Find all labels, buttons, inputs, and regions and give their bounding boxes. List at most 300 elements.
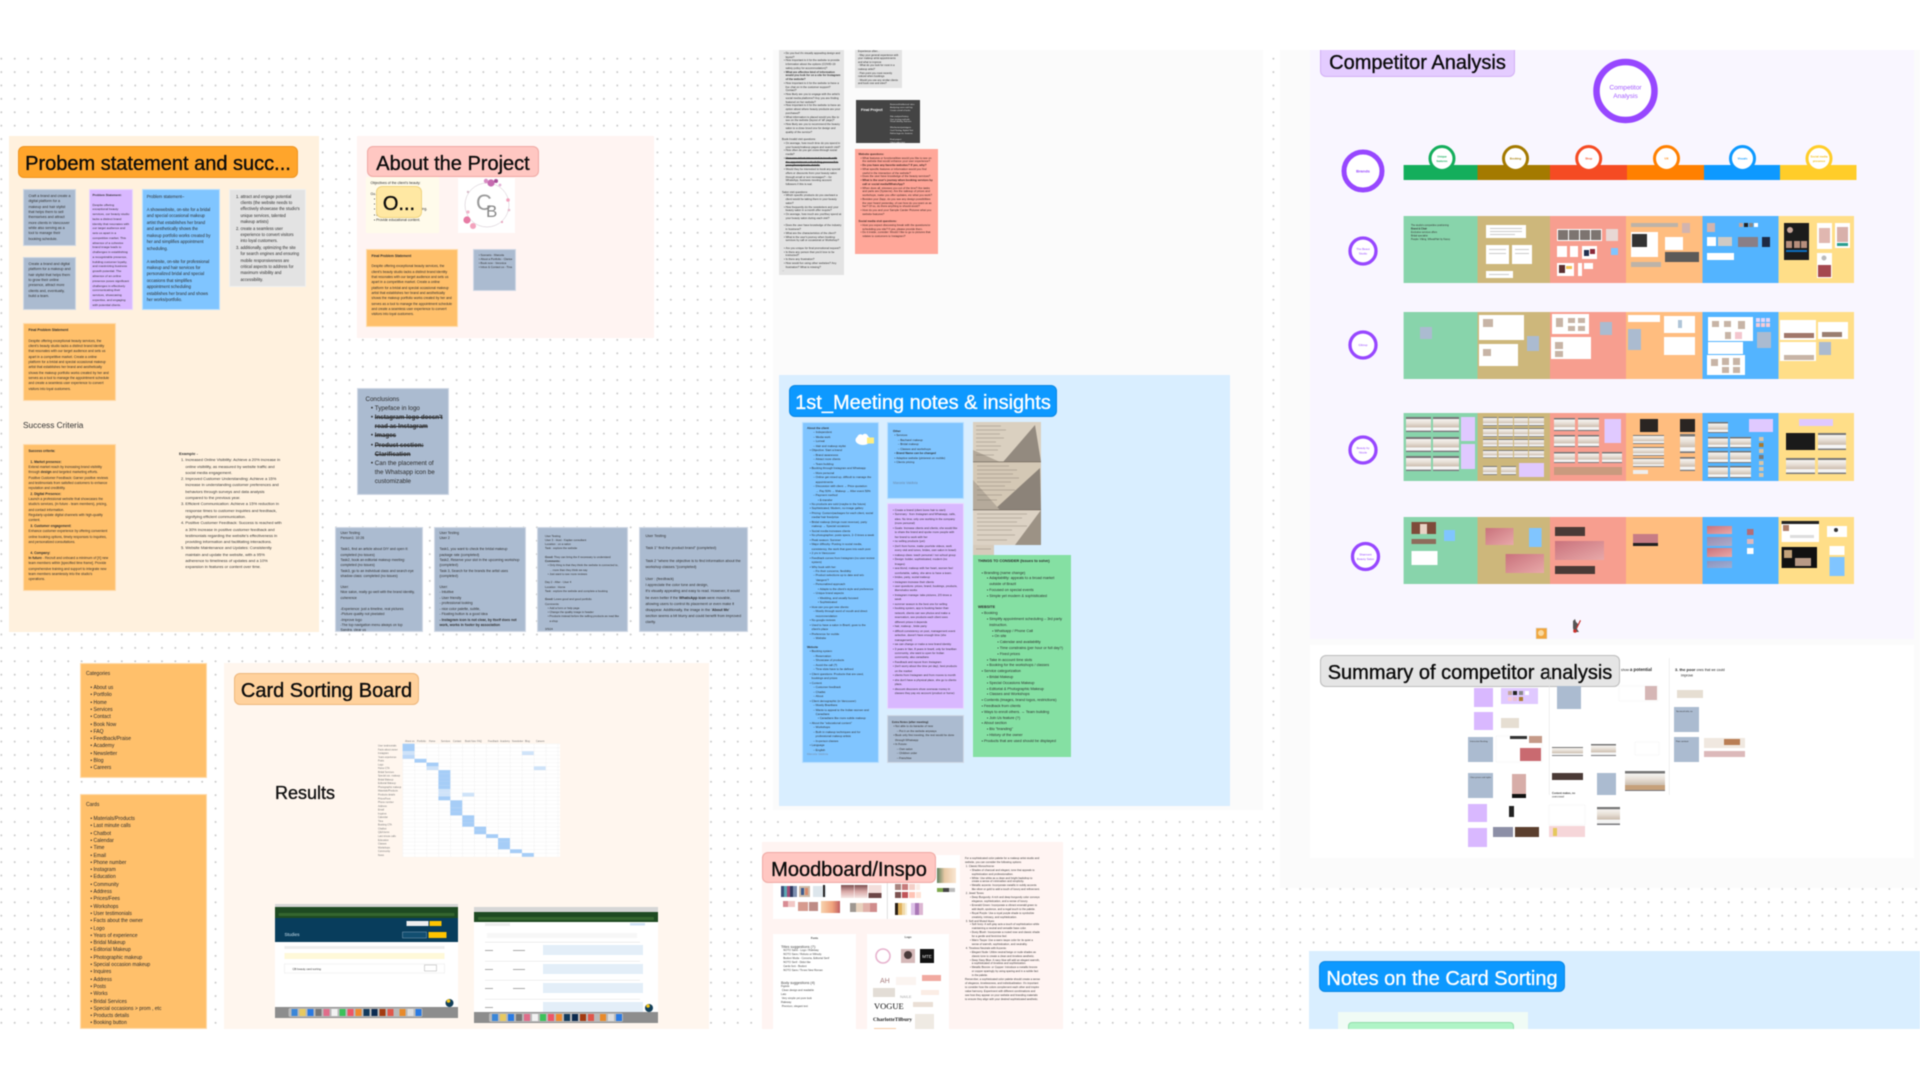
note: website questions: Website questions: bbox=[858, 152, 884, 156]
text block: success examples: Improved Customer Understanding: Achieve a 15% increase in understanding customer preferences and behaviors through surveys and data analysis compared to the previous year. bbox=[185, 476, 279, 500]
note: website questions: Do you have any favorite websites? If yes, why? bbox=[862, 163, 926, 167]
text: slide title: Final Project bbox=[861, 108, 883, 112]
chart: card sort results matrix bbox=[378, 740, 560, 858]
note: card sorting cards: Bridal Makeup bbox=[94, 940, 125, 946]
note: success criteria: 2. Digital Presence: bbox=[30, 492, 61, 496]
note: things to consider: Products that are used should be displayed bbox=[984, 739, 1056, 743]
node: ux: UX bbox=[1665, 156, 1669, 160]
note: things to consider: Time constrains (per hour or full day?) bbox=[1000, 646, 1063, 650]
note: things to consider: Ways to enroll others. → Team building bbox=[984, 710, 1049, 714]
heading: card sorting board bbox=[234, 673, 419, 705]
note: user testing person two: - Instagram icon is not clear, by itself does not work, works in footer by association bbox=[440, 618, 517, 627]
heading: moodboard: Moodboard/Inspo bbox=[771, 858, 927, 880]
image: card sorting results screenshot bbox=[473, 906, 659, 1024]
note: about the client: Website bbox=[807, 645, 818, 649]
panel: font suggestions: Titles suggestions (7): bbox=[781, 945, 816, 949]
note: about the client: No products are sold (maybe in the future) bbox=[812, 502, 866, 506]
note: extra notes after meeting: Children order bbox=[899, 751, 917, 755]
panel: competitor analysis bbox=[1310, 50, 1914, 639]
panel: font suggestions: Raleway bbox=[781, 1001, 791, 1004]
note: about the client: No google reviews bbox=[812, 618, 835, 622]
note: objectives: Simplify appointment scheduling. bbox=[376, 207, 427, 211]
note: about the client: English bbox=[816, 748, 825, 752]
note: card sorting categories: Newsletter bbox=[94, 751, 117, 757]
chart: card sort results matrix: Feedback bbox=[488, 740, 499, 743]
panel: font suggestions bbox=[773, 934, 856, 1029]
text block: colour palette advice: Remember, a sophisticated color palette should create a sense of elegance, timelessness, and individualization. It's important to consider how the colors complement each other and inspire value harmony. Experiment with different combinations and see how they appear on your website and branding materials to ensure they align with your desired sophisticated aesthetic. bbox=[965, 978, 1040, 1001]
column: strengths with notes bbox=[1468, 688, 1542, 847]
note: success criteria: Success criteria: bbox=[28, 449, 55, 453]
row: brand one comparison bbox=[1404, 216, 1854, 283]
card: green note header bbox=[1348, 1022, 1514, 1042]
note: website questions: Do it inside, consider: Would I like to go to pictures that relates to customers to Instagram? bbox=[862, 230, 930, 238]
text block: colour palette advice: White: Use white as a clean and bright backdrop to create a sense of minimalism and simplicity. bbox=[972, 877, 1032, 883]
note: about the client: Social media increases clients bbox=[812, 529, 850, 533]
note: card sorting cards: Time bbox=[94, 845, 104, 851]
note: about the client: Mostly Brazilians bbox=[816, 703, 837, 707]
note: user testing person three: Products instead before the selling products as read like a shop bbox=[549, 614, 619, 622]
note: other services: Adaptive website (pinterest on mobile) bbox=[896, 456, 945, 460]
note: about the client: Objective: Start a brand bbox=[812, 448, 842, 452]
text: show a potential heading: show a potential bbox=[1621, 667, 1652, 672]
panel: about the project bbox=[357, 136, 654, 338]
note: about the client: Hair and makeup stylist bbox=[816, 444, 846, 448]
note: about the client: Payment method bbox=[816, 493, 838, 497]
text block: colour palette advice: Shades of charcoal and elegant, tone that appeals to sophistication and professionalism. bbox=[972, 869, 1035, 876]
heading: card sorting board: Card Sorting Board bbox=[241, 680, 412, 702]
note: other services: Marcela Valdivia bbox=[893, 481, 918, 485]
heading: results: Results bbox=[275, 783, 335, 803]
note: user testing person two: User: bbox=[440, 585, 448, 589]
note: extra notes after meeting: Book only first meeting, the rest would be done through Whatsapp bbox=[895, 733, 954, 742]
note: objectives: Increase brand awareness. bbox=[376, 213, 418, 217]
column: poor examples: Poor contrast bbox=[1676, 740, 1689, 743]
row: brand one comparison: Exclusive services offers bbox=[1411, 231, 1438, 234]
panel: font suggestions: Clean design and readable bbox=[782, 989, 814, 992]
note: meeting insights: we can change or make a new brand identity bbox=[895, 642, 951, 646]
text: slide bullets: Card Testing, Hybrid Test bbox=[890, 130, 913, 132]
text: the poor ones heading bbox=[1675, 667, 1725, 678]
note: user testing person four: User : (feedback) bbox=[646, 577, 674, 581]
heading: competitor analysis: Competitor Analysis bbox=[1329, 52, 1506, 74]
note: interview questions column: What are effective kind of information would you look for on a site for Instagram of the website? bbox=[786, 70, 840, 81]
panel: problem statement and success criteria bbox=[9, 136, 319, 632]
note: things to consider: Calendar and availability bbox=[1000, 640, 1041, 644]
row: brand four comparison bbox=[1404, 517, 1854, 584]
note: user testing person two bbox=[434, 527, 526, 632]
text block: colour palette advice: Timeless Neutrals with Accents: bbox=[969, 947, 1007, 950]
note: interview questions column: Which specific products do you use/want a client would be taking them in your beauty salon? bbox=[786, 194, 838, 205]
note: card sorting categories: Portfolio bbox=[94, 692, 112, 698]
node: competitor analysis root circle: Competitor bbox=[1609, 84, 1642, 92]
node: brand two circle: Glitzup bbox=[1358, 343, 1368, 347]
note: about the client: Media work bbox=[816, 435, 830, 439]
note: card sorting cards: Photographic makeup bbox=[94, 955, 142, 961]
chart: card sort results matrix: Products details bbox=[378, 794, 396, 796]
note: card sorting cards: User testimonials bbox=[94, 911, 132, 917]
panel: font suggestions: Very simple yet pure look bbox=[782, 997, 812, 1000]
note: other services: Services bbox=[896, 433, 907, 437]
panel: summary of competitor analysis bbox=[1310, 645, 1914, 858]
header bar: criteria colour bands bbox=[1404, 165, 1856, 180]
node: brand three circle: Beauty by bbox=[1357, 446, 1370, 450]
note: usability test conclusions bbox=[357, 388, 449, 495]
note: user testing person three: Task : explore the website and complete a booking bbox=[545, 589, 608, 593]
note: about the client: Wedding, and usually focused bbox=[820, 596, 858, 600]
note: user testing person two: Task1, you want to check the bridal makeup package rate (completed) bbox=[440, 547, 507, 557]
column: poor examples bbox=[1674, 690, 1745, 762]
divider: summary columns bbox=[1549, 658, 1670, 795]
text: slide bullets: Visual identity, features bbox=[890, 121, 911, 123]
note: success criteria: Regularly update digital channels with high-quality content. bbox=[28, 513, 103, 522]
note: card sorting cards: Booking button bbox=[94, 1020, 127, 1026]
note: about the client: → Pay 50% → Makeup → After event 50% bbox=[816, 489, 871, 493]
text: slide bullets: Refine logo etc. features bbox=[890, 133, 913, 135]
note: card sorting categories: Feedback/Praise bbox=[94, 736, 131, 742]
note: final problem statement copy: Final Problem Statement bbox=[372, 254, 411, 258]
note: meeting insights bbox=[887, 503, 964, 709]
note: user testing person three: Comments: bbox=[545, 559, 560, 563]
text block: colour palette advice: Soft and Muted Hues: bbox=[969, 920, 995, 922]
panel: logo inspirations: AH bbox=[880, 978, 890, 985]
note: things to consider: Bridal Makeup bbox=[989, 675, 1013, 679]
node: visuals bbox=[1730, 146, 1754, 170]
note: about the client: Booking through Instagram and Whatsapp bbox=[812, 466, 866, 470]
note: project scope: Book now - Veronica bbox=[480, 261, 506, 265]
text block: colour palette advice: Deep Navy Blue: A navy blue will add an elegant warmth, a sophisticated of timeless and sophistication. bbox=[972, 959, 1040, 965]
note: goals list: attract and engage potential clients (the website needs to effectively showcase the studio's unique services, talented makeup artists) bbox=[240, 194, 300, 224]
note: things to consider: Simplify appointment scheduling – 3rd party instruction. bbox=[989, 617, 1062, 627]
note: user testing person one: -Experience: just a timeline, real pictures bbox=[340, 607, 404, 611]
note: meeting insights: 3 years in Van, 8 years in brazil, only for brazilian community, she want to open for Indian community, also canadians bbox=[895, 647, 956, 659]
row: brand three comparison bbox=[1404, 413, 1854, 481]
node: social media: Social media bbox=[1810, 154, 1828, 158]
note: meeting insights: hair, makeup , bride party bbox=[895, 624, 927, 628]
note: user testing person three: 3/5/24 bbox=[545, 627, 553, 631]
note: about the client: Showcase of products bbox=[816, 658, 844, 662]
note: project scope: Inbox & Contact us - Tina bbox=[480, 265, 512, 269]
text: slide bullets: Final project bbox=[890, 139, 901, 141]
note: interview notes small: - May your general experience with your makeup artist appointments and what to improve bbox=[858, 54, 898, 64]
text: slide bullets: Business/Intellectual: sites bbox=[890, 104, 914, 106]
note: extra notes after meeting: Extra Notes (after meeting) bbox=[892, 720, 928, 724]
panel: logo inspirations bbox=[867, 934, 949, 1030]
note: about the client: Content bbox=[812, 681, 822, 685]
node: booking: Booking bbox=[1510, 156, 1521, 160]
note: interview questions column: What is the user's journey when booking services by call or occasional or Workshop? bbox=[786, 236, 839, 242]
logo: floral CB wreath: B bbox=[486, 202, 497, 221]
chart: card sort results matrix: Workshops bbox=[378, 846, 391, 849]
chart: card sort results matrix: Bridal Makeup bbox=[378, 778, 394, 781]
chart: card sort results matrix: Chatbot bbox=[378, 827, 387, 830]
chart: card sort results matrix: Education bbox=[378, 839, 389, 842]
chart: card sort results matrix: Materials/Products bbox=[378, 790, 399, 793]
note: things to consider: Service categorization bbox=[984, 669, 1021, 673]
panel: logo inspirations: MTE bbox=[922, 954, 932, 959]
note: final problem statement bbox=[23, 323, 116, 401]
note: about the client: Peak season: Summer bbox=[812, 538, 841, 542]
note: about the client: Client questions: Products that are used, bookings and prices bbox=[812, 672, 864, 680]
heading: about the project: About the Project bbox=[376, 152, 530, 174]
chart: card sort results matrix: Contact bbox=[453, 740, 462, 743]
card: notes container bbox=[1338, 1012, 1528, 1029]
note: card sorting cards: Cards bbox=[86, 802, 99, 808]
row: brand one comparison: Brand & Chair bbox=[1411, 228, 1427, 230]
note: user testing person two: - professional looking bbox=[440, 601, 473, 605]
note: user testing person three: Location : on a salon bbox=[545, 542, 571, 546]
note: interview questions column: How was talent interested in touch with the appointment scheduling process? Is your phone/private details bbox=[786, 157, 838, 167]
chart: card sort results matrix: Careers bbox=[536, 740, 545, 743]
note: user testing person one: Task3, go to an individual class and search eye shadow class: completed (no issues) bbox=[340, 569, 414, 578]
note: problem statement blue: A website, on-site for professional makeup and hair services for personalized bridal and special occasions that simplifies appointment scheduling establishes her brand and shows her works/portfolio. bbox=[147, 259, 209, 302]
note: about the client: About the "educational content" bbox=[812, 721, 852, 725]
note: things to consider: Booking for the workshops / classes bbox=[989, 663, 1049, 667]
chart: card sort results matrix: Email bbox=[378, 809, 384, 812]
note: things to consider: Branding (name change) bbox=[984, 571, 1025, 575]
note: problem statement purple: Problem Statement: bbox=[92, 193, 122, 197]
node: unique features: features bbox=[1437, 159, 1448, 163]
text block: colour palette advice: Metallic accents: Incorporate metallic in subtly accents like silver or gold to add a touch of luxury and refinement. bbox=[972, 884, 1040, 891]
note: brand goal draft two bbox=[23, 257, 76, 310]
note: card sorting categories: FAQ bbox=[94, 729, 104, 735]
chart: card sort results matrix: Home bbox=[429, 740, 436, 743]
note: things to consider: Bio "branding" bbox=[989, 727, 1013, 731]
heading: summary bbox=[1320, 655, 1620, 687]
note: card sorting cards: Community bbox=[94, 882, 119, 888]
note: card sorting cards: Facts about the owner bbox=[94, 918, 143, 924]
heading: collapsed objectives label: O... bbox=[383, 193, 415, 215]
chart: card sort results matrix: Phone number bbox=[378, 801, 394, 804]
note: about the client: Fix their concerns; flexibility bbox=[816, 569, 851, 573]
image: card sorting studies screenshot bbox=[274, 904, 459, 1019]
node: shop bbox=[1577, 146, 1601, 170]
note: card sorting cards: Posts bbox=[94, 984, 106, 990]
note: final problem statement: Final Problem Statement bbox=[28, 328, 68, 332]
note: user testing person three: Good: They can bring the if necessary to understand bbox=[545, 555, 611, 559]
note: user testing person two: - Intuitive bbox=[440, 590, 454, 594]
panel: card sorting board bbox=[224, 663, 709, 1029]
text: the poor ones heading: improve bbox=[1681, 674, 1693, 678]
text: slide bullets: Wireframes/prototypes bbox=[890, 127, 911, 129]
note: meeting insights: sea blond, makeup with her heart, women feel comfortable, safety, she aims to have a team. bbox=[895, 566, 953, 575]
note: interview questions column: ... bbox=[782, 269, 784, 272]
note: things to consider: Whatsapp / Phone Call bbox=[994, 629, 1033, 633]
note: user testing person one bbox=[335, 527, 423, 632]
text block: success examples: Efficient Communication: Achieve a 15% reduction in response times to customer inquiries and feedback, signifying efficient communication. bbox=[185, 501, 279, 519]
panel: logo inspirations: Logo bbox=[905, 935, 912, 939]
note: user testing person two: User Testing bbox=[440, 531, 459, 535]
note: meeting insights: Instagram manage: take pictures, 2/3 times a week bbox=[895, 593, 952, 601]
note: card sorting cards bbox=[80, 794, 207, 1029]
note: user testing person four: It's visually appealing and easy to read. However, it would be even better if the WhatsApp icon were movable, allowing users to control its placement or even make it disappear. Additionally, the image in the 'About Me' section seems a bit blurry and could benefit from improved clarity. bbox=[646, 589, 741, 624]
note: about the client bbox=[802, 422, 879, 763]
note: card sorting cards: Instagram bbox=[94, 867, 116, 873]
note: website questions bbox=[855, 149, 938, 254]
node: brand one circle bbox=[1350, 238, 1376, 264]
image: card sorting studies screenshot: Studies bbox=[284, 932, 300, 937]
chart: card sort results matrix: Q&A items bbox=[378, 831, 390, 834]
note: card sorting categories bbox=[80, 663, 207, 778]
note: meeting insights: Design: bolder, sophisticated, modern (no Images) bbox=[895, 557, 947, 566]
note: meeting insights: (Isn't worry about the time yet day), best products on the market bbox=[895, 664, 957, 673]
chart: card sort results matrix: News bbox=[378, 854, 385, 857]
note: objectives bbox=[366, 177, 439, 233]
note: usability test conclusions: Instagram logo doesn't read as Instagram bbox=[375, 414, 443, 430]
note: card sorting cards: Prices/Fees bbox=[94, 896, 120, 902]
note: user testing person four bbox=[639, 527, 748, 632]
note: about the client: Client demographic (in Vancouver) bbox=[812, 699, 856, 703]
note: interview notes small bbox=[855, 50, 902, 88]
text block: success examples: Example - bbox=[179, 451, 198, 456]
note: extra notes after meeting: Own salon bbox=[899, 747, 913, 751]
logo: floral CB wreath: C bbox=[476, 190, 492, 215]
text block: colour palette advice: Warm Taupe: Use a warm taupe color for its quiet a sense of warmth, sophistication, and neutrality. bbox=[972, 939, 1033, 946]
note: card sorting cards: Materials/Products bbox=[94, 816, 135, 822]
node: brands circle: Brands bbox=[1356, 168, 1371, 174]
note: user testing person two: - nice color palette, subtle, bbox=[440, 607, 480, 611]
note: interview notes small: - Would you use any similar clients and book now and sites? bbox=[858, 79, 898, 85]
chart: card sort results matrix: Facts about owner bbox=[378, 748, 398, 751]
panel: font suggestions: NOTO Sans / Roboto or Mthody bbox=[783, 953, 821, 956]
node: social media bbox=[1807, 146, 1831, 170]
note: interview questions column: Book-Invalid visit questions: bbox=[782, 138, 816, 141]
note: interview notes small: Experience often... bbox=[858, 50, 880, 53]
note: user testing person one: Person1: 10:26 bbox=[340, 536, 364, 540]
note: other services bbox=[887, 422, 964, 499]
note: card sorting cards: Years of experience bbox=[94, 933, 138, 939]
note: things to consider: Classes and Workshops bbox=[989, 692, 1030, 696]
chart: card sort results matrix: Instagram bbox=[378, 752, 389, 755]
note: objectives: Provide educational content. bbox=[376, 218, 420, 222]
note: success criteria: Launch a professional website that showcases the studio's services, (in future - team members), pricing, and contact information. bbox=[28, 497, 107, 512]
node: brand four circle: Sharmeni bbox=[1359, 552, 1372, 556]
note: meeting insights: clients from Instagram and from moves to month bbox=[895, 673, 956, 677]
note: objectives: Gu... bbox=[370, 192, 378, 196]
image: card sorting studies screenshot: CB beauty card sorting bbox=[292, 967, 321, 971]
panel: font suggestions: NOTO Serif - Didot like bbox=[783, 961, 811, 964]
note: project scope: Scenario - Marcela bbox=[480, 252, 504, 256]
note: website questions: When does all, stresses you out of the time? Are tasks and parts are (Systems). Are the salesup of prices and workshops, make you offer updates, etc what you work? bbox=[862, 186, 932, 197]
note: about the client: Wants to appeal to the Indian women and Canadians bbox=[816, 708, 869, 716]
note: success criteria: Extend market reach by increasing brand visibility through design and targeted marketing efforts. Positive Customer Feedback: Garner positive reviews and testimonials from satisfied customers to enhance reputation and credibility. bbox=[28, 465, 108, 490]
note: usability test conclusions: Can the placement of the Whatsapp icon be customizable bbox=[375, 460, 435, 485]
note: interview questions column bbox=[779, 50, 844, 275]
text block: colour palette advice: For a sophisticated color palette for a makeup artist studio and website, you can consider the following options: bbox=[965, 857, 1039, 864]
note: card sorting categories: Blog bbox=[94, 758, 104, 764]
node: brand four circle bbox=[1352, 544, 1378, 570]
chart: card sort results matrix: About us bbox=[405, 740, 415, 743]
note: things to consider: About section bbox=[984, 721, 1007, 725]
panel: font suggestions: Lato bbox=[781, 993, 786, 996]
node: brand four circle: Beauty Salon bbox=[1357, 557, 1374, 561]
note: card sorting categories: Careers bbox=[94, 765, 111, 771]
note: about the client: Reservation bbox=[816, 654, 831, 658]
note: problem statement blue: Problem statement– bbox=[147, 194, 184, 199]
note: interview notes small: - Pain point you most recently noticed when bookings bbox=[858, 72, 892, 78]
note: about the client: Customer feedback bbox=[816, 685, 841, 689]
chart: card sort results matrix: Portfolio bbox=[417, 740, 426, 743]
panel: first meeting notes and insights bbox=[779, 375, 1230, 806]
note: about the client: Bridal makeup (brings most revenue), party makeup → Special occasions bbox=[812, 520, 867, 528]
text block: success examples: Increased Online Visibility: Achieve a 20% increase in online visibility, as measured by website traffic and social media engagement. bbox=[185, 457, 280, 475]
note: about the client: Independent bbox=[816, 430, 832, 434]
note: interview questions column: How often do you get cross-through social media? bbox=[786, 149, 837, 156]
text: the poor ones heading: 3. the poor ones that we could bbox=[1675, 667, 1725, 672]
text block: colour palette advice: Dusty Blush: Incorporate a muted rose and classic shade for a gentle and feminine feel. bbox=[972, 931, 1040, 938]
note: meeting insights: Create a brand (client loves hair to start) bbox=[895, 508, 945, 512]
panel: font suggestions: Figtree bbox=[781, 985, 789, 988]
node: unique features: Unique bbox=[1437, 154, 1447, 158]
note: website questions: How you expect discussing break with the questions/or scheduling you site? If yes, please provide them. bbox=[862, 223, 930, 231]
node: competitor analysis root circle bbox=[1596, 62, 1654, 120]
note: card sorting cards: Editorial Makeup bbox=[94, 947, 131, 953]
note: user testing person two: - Floating button is a good idea bbox=[440, 612, 488, 616]
note: user testing person three: Day 2 - After - User 4 bbox=[545, 580, 571, 584]
note: user testing person three: Change the quality image in header bbox=[549, 610, 594, 614]
node: brand one circle: The Beaut bbox=[1356, 247, 1370, 251]
note: card sorting categories: Categories bbox=[86, 670, 110, 676]
note: things to consider: THINGS TO CONSIDER (Issues to solve) bbox=[978, 559, 1050, 563]
chart: card sort results matrix: Address bbox=[378, 805, 388, 808]
note: card sorting categories: Contact bbox=[94, 714, 111, 720]
note: success criteria: 1. Market presence: bbox=[30, 460, 62, 464]
panel: font suggestions: Cardo font - Bodoni bbox=[783, 965, 807, 968]
note: goals list bbox=[229, 189, 306, 287]
note: final problem statement copy bbox=[366, 248, 458, 326]
chart: card sort results matrix: Logo bbox=[378, 763, 384, 766]
note: goals list: create a seamless user experience to convert visitors into loyal customers. bbox=[240, 226, 294, 243]
panel: logo inspirations: NAILE bbox=[900, 994, 912, 999]
note: success criteria: Enhance customer experience by offering convenient online booking options, timely responses to inquiries, and personalized consultations. bbox=[28, 529, 107, 544]
note: card sorting cards: Inquires bbox=[94, 969, 111, 975]
note: objectives: Objectives of the client's beauty: bbox=[370, 181, 421, 185]
row: brand two comparison bbox=[1404, 312, 1854, 379]
chart: card sort results matrix: Booking CTA bbox=[378, 824, 392, 827]
note: user testing person four: Task 2 "where the objective is to find information about the workshop classes."(completed) bbox=[646, 559, 741, 569]
text: slide bullets bbox=[890, 103, 915, 144]
note: website questions: Besides your Zapp, do you see any design possibilities the user heard yesterday, of can how do you want us as her? Of so, do there anything to should avoid? bbox=[862, 197, 932, 208]
node: visuals: Visuals bbox=[1738, 156, 1748, 160]
heading: success criteria: Success Criteria bbox=[23, 420, 83, 430]
note: about the client: About bbox=[816, 694, 823, 698]
row: brand one comparison: People: Viking, Wheat/Hair by Kacey bbox=[1411, 238, 1451, 241]
note: meeting insights: she don't have a physical place, she go to clients place, bbox=[895, 678, 956, 686]
note: about the client: Marcela Valdivia bbox=[807, 752, 828, 756]
note: things to consider: Fixed prices bbox=[1000, 652, 1020, 656]
text block: colour palette advice bbox=[964, 856, 1040, 1001]
heading: about the project bbox=[367, 146, 539, 177]
note: things to consider: Booking bbox=[984, 611, 998, 615]
note: user testing person three: User Testing bbox=[545, 534, 560, 538]
note: usability test conclusions: Images bbox=[375, 432, 396, 439]
column: strengths with notes: Clear prices and styles bbox=[1470, 776, 1491, 779]
note: website questions: How do you and your Sample Carder Pictures what you website features? bbox=[862, 208, 931, 216]
note: about the client: Feedback comes from Instagram (no user review system) bbox=[812, 556, 874, 564]
note: things to consider bbox=[973, 555, 1071, 757]
note: card sorting categories: Services bbox=[94, 707, 113, 713]
note: interview questions column: How likely are you to engage with the artist's social media platforms? Any you are finding featured on her website? bbox=[786, 93, 840, 104]
text block: success examples bbox=[178, 451, 282, 570]
note: card sorting categories: Academy bbox=[94, 743, 114, 749]
note: about the client: Mostly through word of mouth and direct recommendation bbox=[816, 609, 867, 618]
note: interview questions column: On average, how much are you/they spend at your beauty salon during each visit? bbox=[786, 213, 841, 220]
note: card sorting categories: Book Now bbox=[94, 722, 116, 728]
note: website questions: What specific features or information would you find useful in the interaction of the website? bbox=[862, 167, 926, 175]
note: user testing person three: User 3 - Host - Kaplan consultant bbox=[545, 538, 586, 542]
note: user testing person three: Comments: bbox=[545, 602, 559, 606]
panel: font suggestions: Fonts bbox=[811, 937, 818, 940]
text: slide bullets: User testing methods bbox=[890, 119, 910, 121]
